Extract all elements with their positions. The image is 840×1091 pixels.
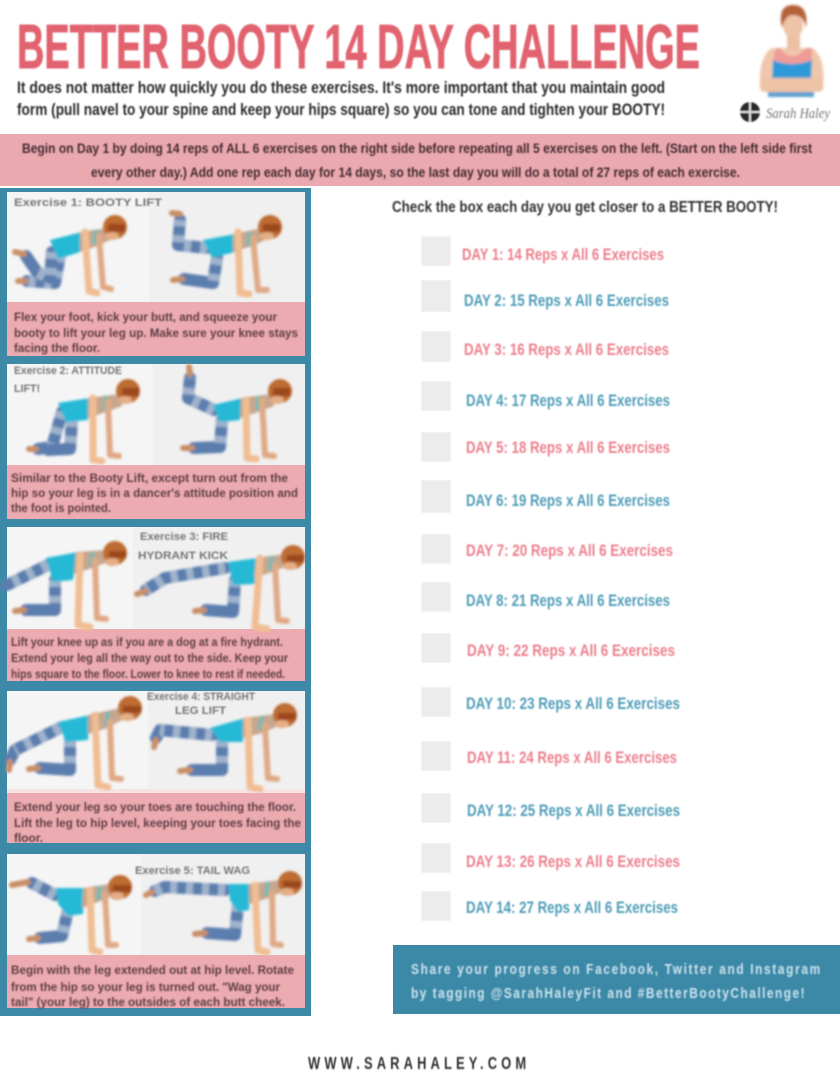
checklist: 14 days: DAY 14: 27 Reps x All 6 Exercises (466, 898, 678, 917)
intro text: form (pull navel to your spine and keep your hips square) so you can tone and tighten your BOOTY! (17, 100, 665, 119)
checklist: 14 days (422, 237, 680, 920)
exercise 5: tail wag: Exercise 5: TAIL WAG (135, 865, 250, 877)
exercise 4: straight leg lift: floor. (14, 833, 43, 845)
exercise 1: booty lift: booty to lift your leg up. Make sure your knee stays (14, 328, 298, 340)
exercise 1: booty lift: Flex your foot, kick your butt, and squeeze your (14, 312, 278, 324)
exercise 2: attitude lift: LIFT! (14, 383, 40, 395)
exercise 3: fire hydrant kick: hips square to the floor. Lower to knee to rest if needed. (11, 669, 285, 681)
exercise 4: straight leg lift: Exercise 4: STRAIGHT (147, 691, 255, 703)
checklist: 14 days: DAY 3: 16 Reps x All 6 Exercises (464, 340, 669, 359)
exercise 5: tail wag: from the hip so your leg is turned out. "Wag your (11, 982, 281, 994)
checklist: 14 days: DAY 9: 22 Reps x All 6 Exercises (467, 641, 675, 660)
exercise 2: attitude lift: the foot is pointed. (11, 503, 111, 515)
checklist: 14 days: DAY 5: 18 Reps x All 6 Exercises (466, 438, 670, 457)
checklist: 14 days: DAY 10: 23 Reps x All 6 Exercises (466, 694, 680, 713)
intro text: It does not matter how quickly you do these exercises. It's more important that you maintain good (17, 78, 665, 97)
exercise 1: booty lift: Exercise 1: BOOTY LIFT (14, 197, 162, 209)
exercise 3: fire hydrant kick: Extend your leg all the way out to the side. Keep your (11, 653, 288, 665)
logo: Sarah Haley (740, 102, 830, 122)
checklist: 14 days: DAY 6: 19 Reps x All 6 Exercises (466, 491, 670, 510)
exercise 4: straight leg lift: LEG LIFT (175, 705, 226, 717)
share callout: Share your progress on Facebook, Twitter and Instagram (411, 961, 820, 977)
share callout (393, 945, 840, 1014)
instruction banner (0, 134, 840, 186)
share callout: by tagging @SarahHaleyFit and #BetterBootyChallenge! (411, 985, 805, 1001)
exercise 3: fire hydrant kick: Lift your knee up as if you are a dog at a fire hydrant. (11, 637, 283, 649)
panel: exercises (0, 188, 311, 1016)
checklist: 14 days: DAY 2: 15 Reps x All 6 Exercises (464, 291, 669, 310)
logo: Sarah Haley: Sarah Haley (766, 106, 830, 122)
exercise 2: attitude lift: Similar to the Booty Lift, except turn out from the (11, 473, 288, 485)
checklist: 14 days: DAY 13: 26 Reps x All 6 Exercises (466, 852, 680, 871)
exercise 1: booty lift (7, 192, 305, 356)
exercise 4: straight leg lift: Lift the leg to hip level, keeping your toes facing the (14, 818, 301, 830)
instruction banner: every other day.) Add one rep each day for 14 days, so the last day you will do a total of 27 reps of each exercise. (91, 164, 740, 180)
exercise 2: attitude lift: Exercise 2: ATTITUDE (14, 365, 122, 377)
exercise 5: tail wag: tail" (your leg) to the outsides of each butt cheek. (11, 997, 285, 1009)
checklist: 14 days: DAY 1: 14 Reps x All 6 Exercises (462, 245, 664, 264)
exercise 3: fire hydrant kick: HYDRANT KICK (138, 550, 228, 562)
checklist: 14 days: DAY 8: 21 Reps x All 6 Exercises (466, 591, 670, 610)
footer website: WWW.SARAHALEY.COM (308, 1054, 526, 1074)
checklist: 14 days: DAY 4: 17 Reps x All 6 Exercises (466, 391, 670, 410)
exercise 2: attitude lift (7, 364, 305, 519)
exercise 5: tail wag: Begin with the leg extended out at hip level. Rotate (11, 965, 294, 977)
checklist: 14 days: DAY 7: 20 Reps x All 6 Exercises (466, 541, 673, 560)
exercise 3: fire hydrant kick: Exercise 3: FIRE (140, 531, 228, 543)
exercise 4: straight leg lift: Extend your leg so your toes are touching the floor. (14, 802, 296, 814)
checklist: 14 days: DAY 11: 24 Reps x All 6 Exercises (467, 748, 677, 767)
exercise 1: booty lift: facing the floor. (14, 343, 100, 355)
portrait: Sarah Haley (760, 5, 824, 97)
exercise 3: fire hydrant kick (7, 527, 305, 681)
exercise 5: tail wag (7, 854, 305, 1009)
exercise 2: attitude lift: hip so your leg is in a dancer's attitude position and (11, 488, 298, 500)
exercise 4: straight leg lift (7, 691, 305, 845)
intro text (17, 78, 665, 119)
checklist: 14 days: DAY 12: 25 Reps x All 6 Exercises (467, 801, 680, 820)
